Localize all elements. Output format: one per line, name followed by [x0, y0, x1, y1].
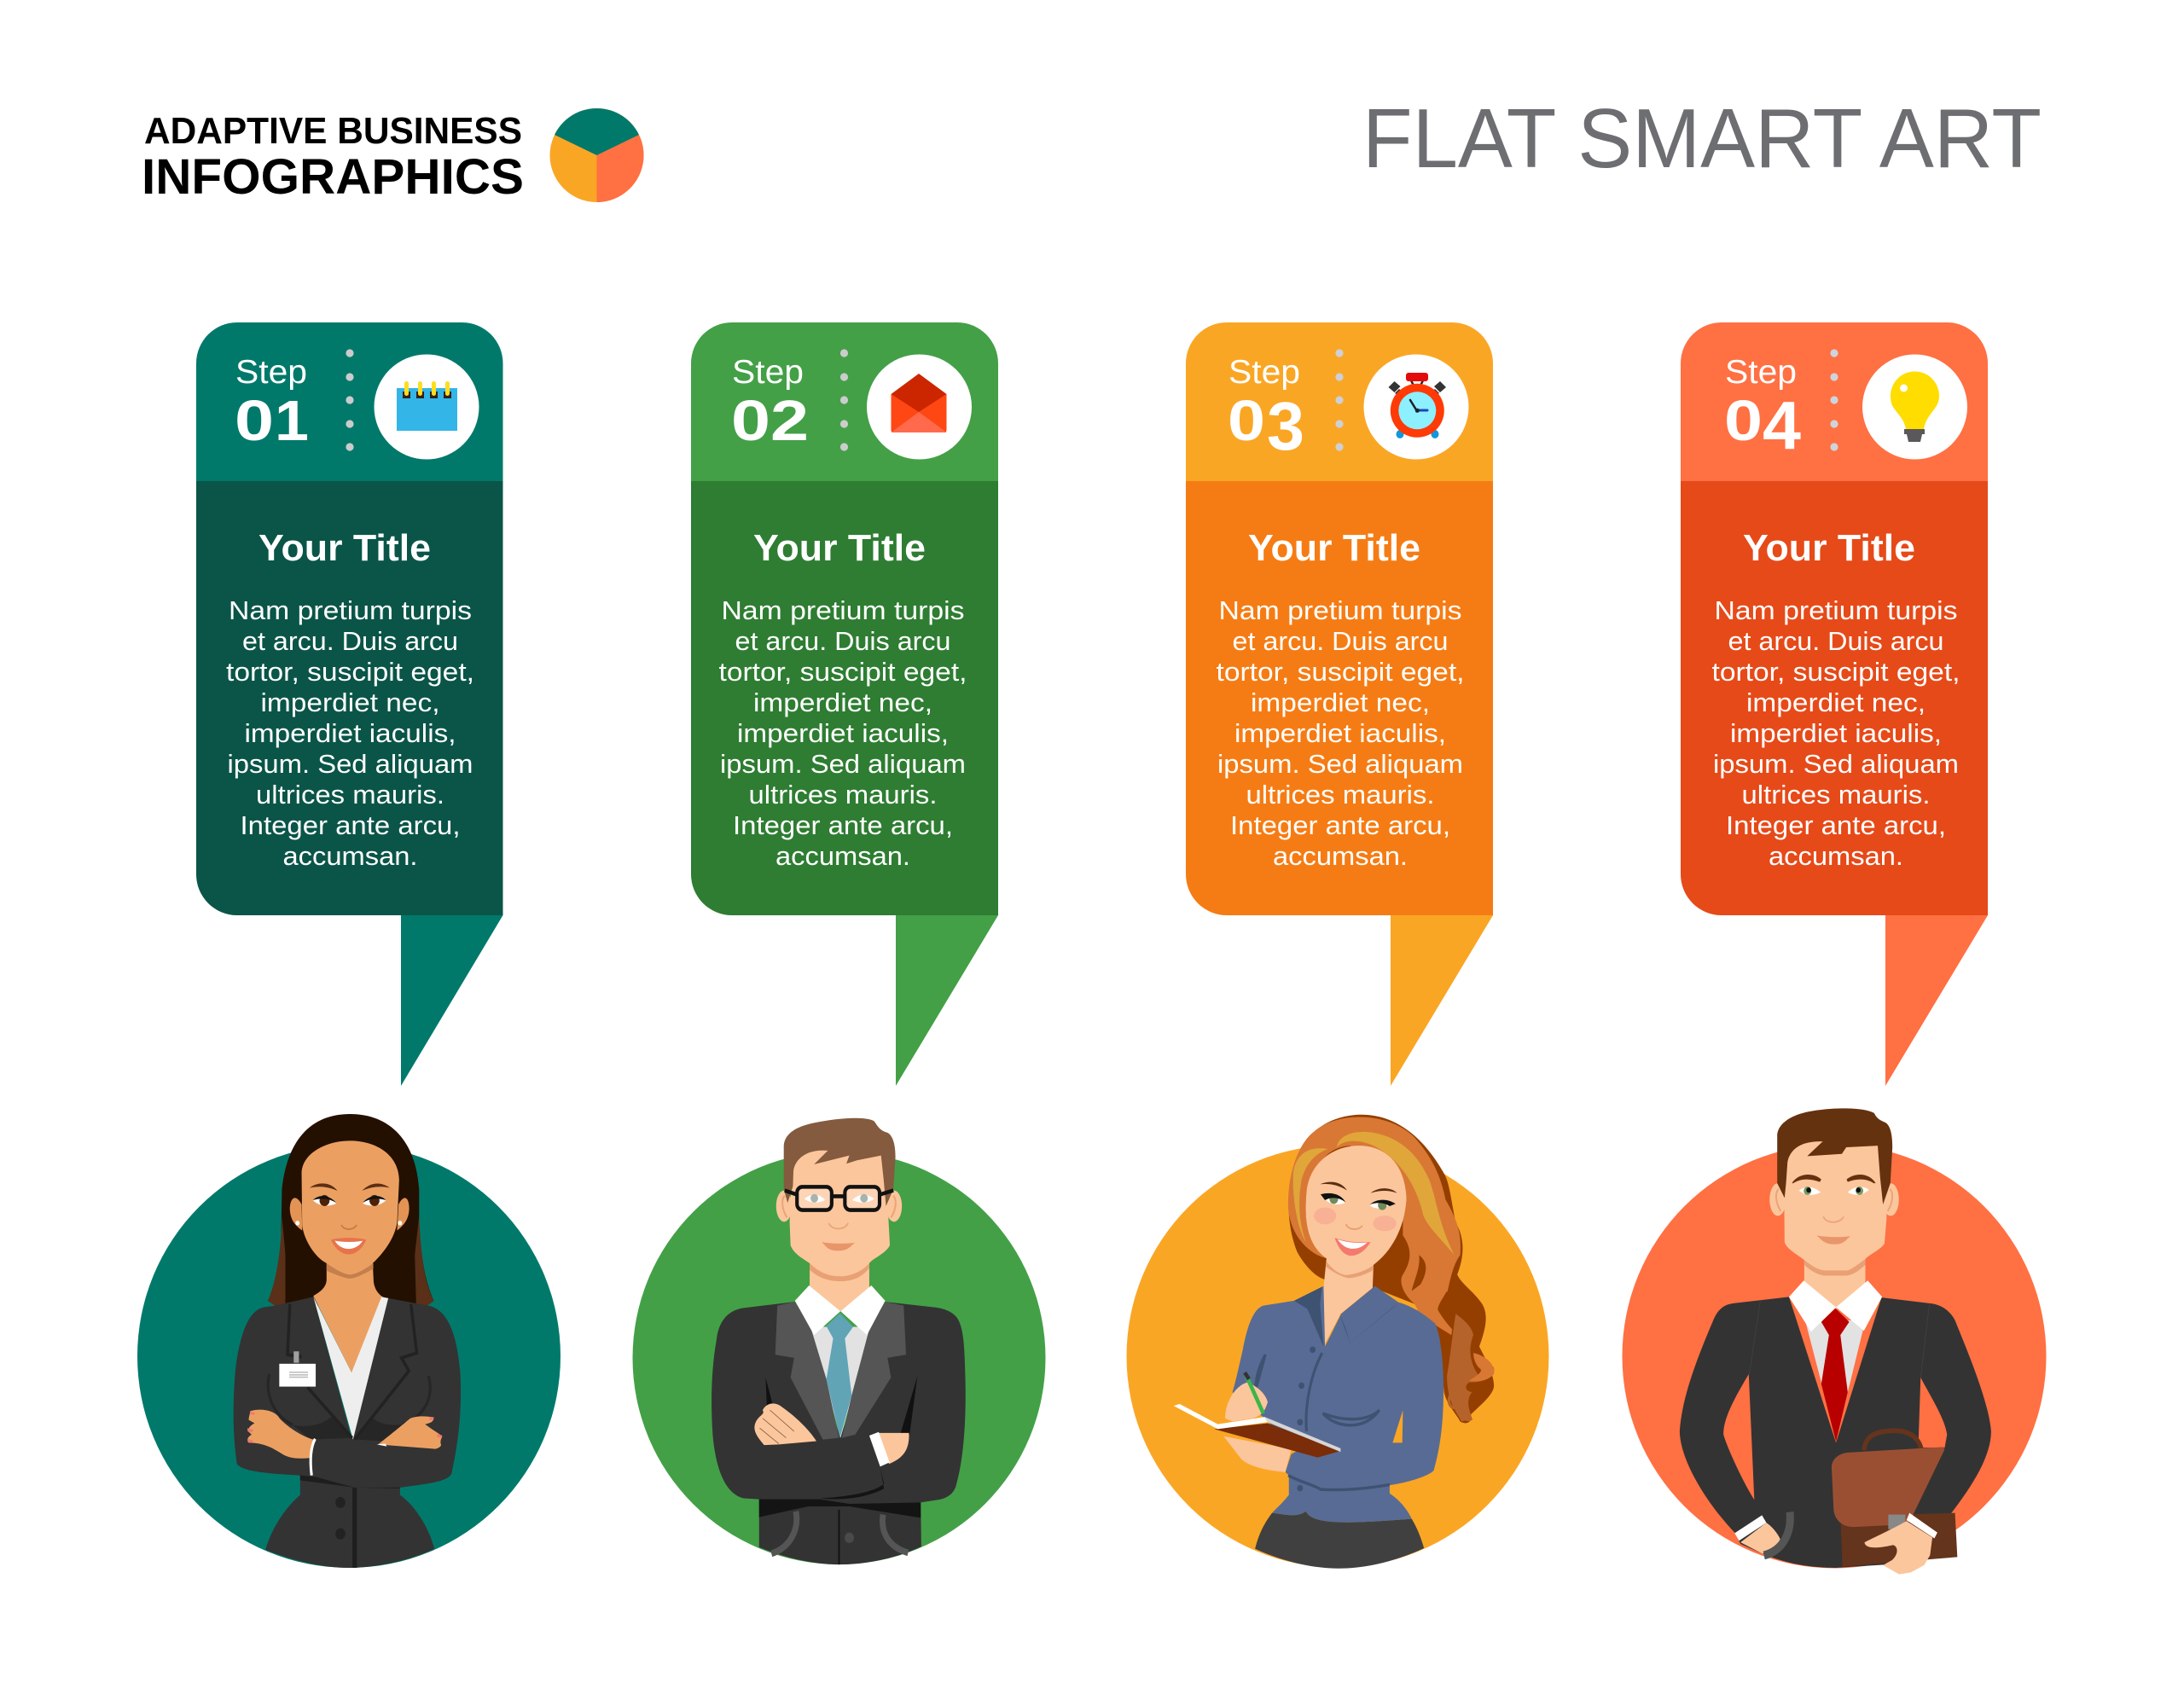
card text: tortor, suscipit eget,	[1217, 657, 1464, 687]
blouse	[1233, 1286, 1443, 1523]
card text: imperdiet nec,	[1251, 688, 1430, 717]
panel: step 04	[1681, 322, 1988, 1086]
tie	[1821, 1309, 1850, 1442]
card text: et arcu. Duis arcu	[242, 626, 458, 656]
icon: alarm clock	[1363, 355, 1469, 459]
card title: Your Title	[1743, 527, 1915, 569]
pointer	[1885, 915, 1988, 1086]
dotted divider	[346, 349, 354, 451]
step number: 1	[275, 389, 309, 453]
step number	[1724, 387, 1802, 463]
dotted divider	[840, 349, 848, 451]
card title: Your Title	[258, 527, 431, 569]
card text: et arcu. Duis arcu	[1232, 626, 1449, 656]
person 1: businesswoman with dark hair on teal circle	[137, 1114, 561, 1568]
hands and notebook	[1225, 1383, 1268, 1422]
card header	[691, 322, 998, 481]
nose and mouth	[828, 1223, 848, 1228]
jacket	[1680, 1297, 1991, 1568]
card text: imperdiet iaculis,	[1730, 718, 1942, 748]
card text: Nam pretium turpis	[1218, 595, 1462, 625]
hair	[268, 1114, 434, 1306]
logo text: INFOGRAPHICS	[142, 149, 524, 205]
card text: ipsum. Sed aliquam	[1217, 749, 1463, 779]
card body	[196, 478, 503, 915]
shirt	[1805, 1320, 1866, 1441]
card header	[1681, 322, 1988, 481]
card text: imperdiet nec,	[753, 688, 932, 717]
step label: Step	[1725, 354, 1797, 391]
skirt	[1255, 1512, 1424, 1569]
card text: imperdiet iaculis,	[244, 718, 456, 748]
card text: accumsan.	[283, 841, 418, 871]
hair waves	[1408, 1255, 1494, 1422]
hair	[1777, 1108, 1892, 1204]
card text: ultrices mauris.	[1742, 780, 1930, 809]
card text: accumsan.	[775, 841, 910, 871]
card text: accumsan.	[1273, 841, 1408, 871]
icon: notepad	[374, 355, 479, 459]
card text: Nam pretium turpis	[722, 595, 964, 625]
hair light	[1288, 1117, 1461, 1335]
card text: ultrices mauris.	[749, 780, 937, 809]
person 2: businessman with glasses on green circle	[633, 1118, 1046, 1564]
panel: step 01	[196, 322, 503, 1086]
facial features	[1792, 1175, 1876, 1183]
icon: light bulb	[1862, 355, 1967, 459]
lapels	[775, 1302, 839, 1440]
face and neck	[790, 1146, 890, 1311]
card text: imperdiet nec,	[261, 688, 440, 717]
card header	[196, 322, 503, 481]
ears	[776, 1191, 902, 1221]
arm gaps	[1723, 1374, 1754, 1500]
card text: ipsum. Sed aliquam	[1713, 749, 1959, 779]
hands and cuff	[754, 1403, 816, 1445]
step number: 3	[1267, 388, 1304, 464]
lapels and shadows	[268, 1304, 430, 1441]
folded arm shading	[300, 1476, 400, 1488]
face and neck	[1306, 1146, 1407, 1347]
facial features	[1320, 1182, 1397, 1193]
card text: et arcu. Duis arcu	[735, 626, 950, 656]
shirt	[810, 1327, 870, 1438]
waist gap	[1392, 1410, 1403, 1442]
jacket	[234, 1297, 461, 1568]
card text	[718, 595, 967, 871]
card text: Integer ante arcu,	[1230, 810, 1450, 840]
card body	[691, 478, 998, 915]
card text	[1711, 595, 1960, 871]
left hand and pocket	[1740, 1523, 1780, 1554]
step label: Step	[235, 354, 307, 391]
arm and cuff	[311, 1440, 451, 1488]
step number	[235, 389, 309, 453]
card text: Nam pretium turpis	[229, 595, 472, 625]
face and neck	[1784, 1134, 1887, 1309]
card text	[226, 595, 474, 871]
icon: envelope	[867, 355, 972, 459]
facial features	[310, 1183, 390, 1191]
icon: logo pie	[549, 108, 644, 202]
folded arm shadows	[765, 1376, 917, 1435]
card body	[1681, 478, 1988, 915]
step number: 4	[1763, 387, 1802, 463]
face and neck	[302, 1140, 399, 1372]
person 3: businesswoman with red hair on orange circle	[1126, 1115, 1549, 1569]
panel: step 03	[1186, 322, 1493, 1086]
person 4: businessman with briefcase on coral circle	[1623, 1108, 2046, 1575]
card body	[1186, 478, 1493, 915]
step number	[731, 389, 809, 453]
step number: 2	[770, 389, 809, 453]
logo text: ADAPTIVE BUSINESS	[144, 110, 522, 152]
hair	[784, 1118, 896, 1206]
step number: 0	[235, 389, 274, 453]
jacket	[712, 1302, 966, 1564]
name badge	[279, 1351, 316, 1387]
card text: tortor, suscipit eget,	[226, 657, 474, 687]
glasses and eyes	[804, 1195, 874, 1203]
card text: tortor, suscipit eget,	[718, 657, 967, 687]
pen	[1246, 1374, 1263, 1413]
card title: Your Title	[753, 527, 926, 569]
card text: ipsum. Sed aliquam	[720, 749, 966, 779]
logo: Adaptive Business Infographics	[142, 108, 644, 205]
step label: Step	[732, 354, 804, 391]
ears	[1769, 1183, 1899, 1216]
step number: 0	[731, 389, 770, 453]
title: Flat Smart Art: FLAT SMART ART	[1362, 91, 2042, 185]
hands	[247, 1410, 313, 1459]
panel: step 02	[691, 322, 998, 1086]
collar	[1789, 1280, 1882, 1332]
briefcase	[1832, 1430, 1957, 1566]
step number: 0	[1228, 389, 1265, 453]
card text: ultrices mauris.	[256, 780, 444, 809]
card text: et arcu. Duis arcu	[1728, 626, 1943, 656]
card text: tortor, suscipit eget,	[1711, 657, 1960, 687]
step label: Step	[1228, 354, 1300, 391]
collar	[795, 1285, 886, 1335]
card text: accumsan.	[1769, 841, 1903, 871]
logo text	[142, 110, 524, 205]
ears	[290, 1198, 410, 1231]
pointer	[896, 915, 998, 1086]
card text: imperdiet iaculis,	[1234, 718, 1446, 748]
card text: Integer ante arcu,	[733, 810, 953, 840]
card text: Nam pretium turpis	[1715, 595, 1957, 625]
card title: Your Title	[1248, 527, 1420, 569]
hair highlight	[1293, 1132, 1455, 1255]
card text	[1217, 595, 1464, 871]
hair back	[1288, 1115, 1494, 1423]
pointer	[401, 915, 503, 1086]
step number	[1228, 388, 1304, 464]
step number: 0	[1724, 389, 1763, 453]
card text: imperdiet iaculis,	[737, 718, 949, 748]
tie	[827, 1313, 853, 1438]
card text: Integer ante arcu,	[1726, 810, 1946, 840]
blouse	[313, 1297, 388, 1440]
card text: Integer ante arcu,	[241, 810, 461, 840]
card text: ultrices mauris.	[1246, 780, 1435, 809]
card text: imperdiet nec,	[1746, 688, 1926, 717]
card text: ipsum. Sed aliquam	[227, 749, 473, 779]
pointer	[1391, 915, 1493, 1086]
dotted divider	[1830, 349, 1838, 451]
dotted divider	[1335, 349, 1344, 451]
card header	[1186, 322, 1493, 481]
right hand and cuff	[1864, 1521, 1932, 1575]
